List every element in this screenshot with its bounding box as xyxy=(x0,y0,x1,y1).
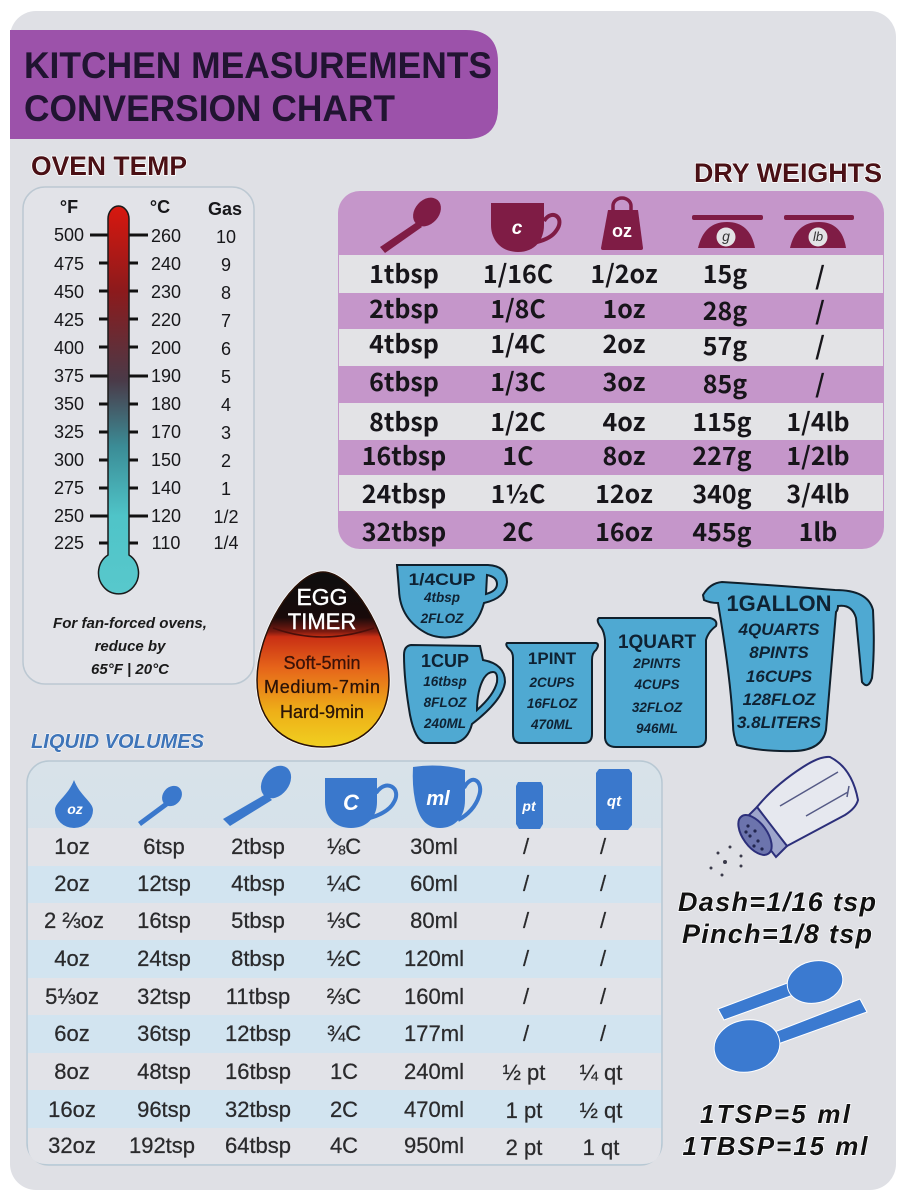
icon: small spoon xyxy=(138,782,186,826)
measure: 1 gallon: 8PINTS xyxy=(749,643,809,662)
temperature scale labels: 275 xyxy=(54,478,84,498)
measure: 1 pint: 470ML xyxy=(530,717,573,732)
heading: dry weights: DRY WEIGHTS xyxy=(694,158,882,188)
measure: 1 pint: 1PINT xyxy=(528,649,577,668)
liquid volumes rows: 12tbsp xyxy=(225,1021,291,1046)
icon: salt shaker xyxy=(710,757,858,876)
dry weights rows: 15g xyxy=(703,255,747,291)
dry weights rows: 115g xyxy=(692,403,752,439)
dry weights rows: 1C xyxy=(502,437,534,473)
temperature scale labels: 150 xyxy=(151,450,181,470)
dry weights rows: 16oz xyxy=(595,513,653,549)
panel: oven temperature xyxy=(23,187,254,684)
text: dash and pinch: Dash=1/16 tsp xyxy=(678,887,876,917)
liquid volumes rows: 60ml xyxy=(410,871,458,896)
temperature scale labels: 300 xyxy=(54,450,84,470)
measure: 1 quart: 32FLOZ xyxy=(632,700,683,715)
icon: g scale xyxy=(692,215,763,248)
dry weights rows: / xyxy=(815,257,825,293)
dry weights rows: 1/2lb xyxy=(786,437,850,473)
measure: 1/4 cup xyxy=(397,565,507,638)
temperature scale labels: Gas xyxy=(208,199,242,219)
temperature scale labels: 1/2 xyxy=(213,507,239,527)
measure: 1 cup xyxy=(404,645,505,743)
icon: qt can: qt xyxy=(607,793,622,810)
heading: oven temp: OVEN TEMP xyxy=(31,151,187,181)
liquid volumes rows: 2 pt xyxy=(506,1135,542,1160)
icon: c cup: C xyxy=(343,790,360,815)
icon: large spoon xyxy=(223,760,297,826)
dry weights rows: 1oz xyxy=(603,290,646,326)
liquid volumes rows: ½ pt xyxy=(503,1060,545,1085)
temperature scale labels: 425 xyxy=(54,310,84,330)
text: teaspoon and tablespoon xyxy=(682,1099,868,1161)
liquid volumes rows: 80ml xyxy=(410,908,458,933)
temperature scale labels: 500 xyxy=(54,225,84,245)
liquid volumes rows: 64tbsp xyxy=(225,1133,291,1158)
icon: oz drop xyxy=(55,780,93,828)
measure: 1/4 cup: 2FLOZ xyxy=(420,611,464,626)
fan-forced note: 65°F | 20°C xyxy=(91,661,170,678)
liquid volumes rows: 30ml xyxy=(410,834,458,859)
temperature scale labels: 230 xyxy=(151,282,181,302)
icon: ml mug: ml xyxy=(426,788,450,810)
fan-forced note: reduce by xyxy=(95,638,166,655)
temperature scale labels: 180 xyxy=(151,394,181,414)
temperature scale labels: °F xyxy=(60,197,78,217)
egg timer: EGG xyxy=(296,584,348,610)
liquid volumes rows: 192tsp xyxy=(129,1133,195,1158)
liquid volumes rows: 1oz xyxy=(54,834,90,859)
dry weights rows: 12oz xyxy=(595,475,653,511)
measure: 1/4 cup: 4tbsp xyxy=(423,590,460,605)
dry weights rows: 1/4C xyxy=(490,325,546,361)
temperature scale labels: 4 xyxy=(221,395,231,415)
icon: qt can xyxy=(596,769,632,830)
liquid volumes rows: / xyxy=(523,871,530,896)
dry weights rows: 28g xyxy=(703,292,747,328)
dry weights rows: 1/2C xyxy=(490,403,546,439)
panel: dry weights table xyxy=(338,191,884,549)
measure: 1 gallon: 1GALLON xyxy=(726,591,832,616)
dry weights rows: 3oz xyxy=(603,363,646,399)
liquid volumes rows: 2tbsp xyxy=(231,834,285,859)
dry weights rows: 57g xyxy=(703,327,747,363)
liquid volumes rows: 6tsp xyxy=(143,834,185,859)
icon: pt can: pt xyxy=(521,798,537,814)
dry weights rows: 227g xyxy=(692,437,752,473)
liquid volumes rows: 11tbsp xyxy=(226,984,290,1009)
measure: 1 quart: 2PINTS xyxy=(632,656,681,671)
temperature scale labels: 140 xyxy=(151,478,181,498)
liquid volumes rows: / xyxy=(523,834,530,859)
temperature scale labels: 7 xyxy=(221,311,231,331)
liquid volumes rows: 5tbsp xyxy=(231,908,285,933)
liquid volumes rows: 8tbsp xyxy=(231,946,285,971)
liquid volumes rows: 96tsp xyxy=(137,1097,191,1122)
dry weights rows: 32tbsp xyxy=(362,513,446,549)
measure: 1 quart: 4CUPS xyxy=(633,677,680,692)
liquid volumes rows xyxy=(44,834,622,1160)
liquid volumes rows: 177ml xyxy=(404,1021,464,1046)
measure: 1 gallon: 3.8LITERS xyxy=(737,713,822,732)
dry weights rows: 2tbsp xyxy=(369,290,439,326)
dry weights rows: 3/4lb xyxy=(786,475,850,511)
title line 1: KITCHEN MEASUREMENTS xyxy=(24,45,492,86)
temperature scale labels: 225 xyxy=(54,533,84,553)
measure: 1 quart: 946ML xyxy=(636,721,678,736)
text: dash and pinch xyxy=(678,887,876,949)
liquid volumes rows: 5⅓oz xyxy=(45,984,99,1009)
icon: g scale: g xyxy=(722,228,730,244)
temperature scale labels: 475 xyxy=(54,254,84,274)
liquid volumes rows: / xyxy=(523,946,530,971)
light row bands xyxy=(339,255,883,511)
dry weights rows: 1lb xyxy=(799,513,837,549)
temperature scale labels: 8 xyxy=(221,283,231,303)
temperature scale labels: 200 xyxy=(151,338,181,358)
icon: measuring spoons xyxy=(710,956,867,1077)
measure: 1 pint xyxy=(506,643,598,743)
liquid volumes rows: ⅛C xyxy=(327,834,361,859)
liquid volumes rows: / xyxy=(600,834,607,859)
liquid volumes rows: 48tsp xyxy=(137,1059,191,1084)
liquid volumes rows: 32tbsp xyxy=(225,1097,291,1122)
liquid volumes rows: 16tsp xyxy=(137,908,191,933)
liquid volumes rows: / xyxy=(600,908,607,933)
dry weights rows: 1/3C xyxy=(490,363,546,399)
measure: 1 pint: 16FLOZ xyxy=(527,696,578,711)
dry weights rows: 8oz xyxy=(603,437,646,473)
dry weights rows: / xyxy=(815,327,825,363)
temperature scale labels: 170 xyxy=(151,422,181,442)
icon: lb scale: lb xyxy=(813,229,823,244)
liquid volumes rows: 4C xyxy=(330,1133,358,1158)
text: teaspoon and tablespoon: 1TBSP=15 ml xyxy=(682,1131,868,1161)
liquid volumes rows: / xyxy=(600,871,607,896)
liquid volumes rows: 4tbsp xyxy=(231,871,285,896)
liquid volumes rows: / xyxy=(523,908,530,933)
dry weights rows: 455g xyxy=(692,513,752,549)
egg timer: TIMER xyxy=(288,609,356,634)
fan-forced note: For fan-forced ovens, xyxy=(53,615,207,632)
dry weights rows: 1½C xyxy=(491,475,545,511)
temperature scale labels: 10 xyxy=(216,227,236,247)
liquid volumes rows: / xyxy=(523,1021,530,1046)
dry weights rows: 8tbsp xyxy=(369,403,439,439)
dry weights rows xyxy=(362,255,850,549)
egg timer: Hard-9min xyxy=(280,702,364,722)
icon: oz drop: oz xyxy=(67,801,83,817)
row bands xyxy=(28,828,661,1164)
liquid volumes rows: 950ml xyxy=(404,1133,464,1158)
egg timer: Medium-7min xyxy=(264,677,380,697)
temperature scale labels: °C xyxy=(150,197,170,217)
measure: 1 gallon xyxy=(703,582,874,751)
dry weights rows: 1tbsp xyxy=(369,255,439,291)
temperature scale labels: 120 xyxy=(151,506,181,526)
liquid volumes rows: ⅓C xyxy=(327,908,361,933)
liquid volumes rows: 2 ⅔oz xyxy=(44,908,104,933)
temperature scale labels: 1/4 xyxy=(213,533,239,553)
thermometer ticks xyxy=(90,235,148,543)
icon: cup: c xyxy=(512,218,523,239)
temperature scale labels: 375 xyxy=(54,366,84,386)
liquid volumes rows: 12tsp xyxy=(137,871,191,896)
liquid volumes rows: ¾C xyxy=(327,1021,361,1046)
icon: oz weight: oz xyxy=(612,221,632,241)
egg timer xyxy=(257,572,389,747)
temperature scale labels: 350 xyxy=(54,394,84,414)
measure: 1 quart: 1QUART xyxy=(618,632,696,653)
temperature scale labels: 190 xyxy=(151,366,181,386)
dry weights rows: 1/2oz xyxy=(590,255,658,291)
dry weights rows: 1/4lb xyxy=(786,403,850,439)
icon: c cup xyxy=(325,778,396,828)
title banner xyxy=(10,30,498,139)
liquid volumes rows: 1 pt xyxy=(506,1098,542,1123)
liquid volumes rows: 4oz xyxy=(54,946,90,971)
dry weights rows: 1/16C xyxy=(483,255,553,291)
liquid volumes rows: 32tsp xyxy=(137,984,191,1009)
temperature scale labels: 220 xyxy=(151,310,181,330)
liquid volumes rows: 160ml xyxy=(404,984,464,1009)
liquid volumes rows: ¼C xyxy=(327,871,361,896)
liquid volumes rows: 470ml xyxy=(404,1097,464,1122)
measure: 1 gallon: 4QUARTS xyxy=(738,620,820,639)
liquid volumes rows: 6oz xyxy=(54,1021,90,1046)
icon: oz weight xyxy=(601,198,643,250)
liquid volumes rows: 2oz xyxy=(54,871,90,896)
liquid volumes rows: / xyxy=(523,984,530,1009)
dry weights rows: 85g xyxy=(703,365,747,401)
temperature scale labels: 110 xyxy=(152,533,180,553)
measure: 1 cup: 8FLOZ xyxy=(424,695,467,710)
temperature scale labels: 5 xyxy=(221,367,231,387)
temperature scale labels: 260 xyxy=(151,226,181,246)
liquid volumes rows: 2C xyxy=(330,1097,358,1122)
temperature scale labels: 3 xyxy=(221,423,231,443)
liquid volumes rows: 240ml xyxy=(404,1059,464,1084)
icon: pt can xyxy=(516,782,543,829)
dry weights rows: 4oz xyxy=(603,403,646,439)
liquid volumes rows: ⅔C xyxy=(327,984,361,1009)
measure: 1 cup: 1CUP xyxy=(421,651,469,671)
text: dash and pinch: Pinch=1/8 tsp xyxy=(682,919,872,949)
liquid volumes rows: 1C xyxy=(330,1059,358,1084)
temperature scale labels: 2 xyxy=(221,451,231,471)
liquid volumes rows: 8oz xyxy=(54,1059,90,1084)
fan-forced note xyxy=(53,615,207,678)
liquid volumes rows: / xyxy=(600,946,607,971)
liquid volumes rows: ¼ qt xyxy=(580,1060,622,1085)
measure: 1/4 cup: 1/4CUP xyxy=(408,570,476,589)
dry weights rows: 2C xyxy=(502,513,534,549)
dry weights rows: 1/8C xyxy=(490,290,546,326)
temperature scale labels: 9 xyxy=(221,255,231,275)
liquid volumes rows: 36tsp xyxy=(137,1021,191,1046)
egg timer: Soft-5min xyxy=(283,653,361,673)
heading: liquid volumes: LIQUID VOLUMES xyxy=(31,731,205,753)
temperature scale labels: 325 xyxy=(54,422,84,442)
dry weights rows: 6tbsp xyxy=(369,363,439,399)
liquid volumes rows: 24tsp xyxy=(137,946,191,971)
liquid volumes rows: 120ml xyxy=(404,946,464,971)
dry weights rows: 24tbsp xyxy=(362,475,446,511)
dry weights rows: 2oz xyxy=(603,325,646,361)
dry weights rows: 4tbsp xyxy=(369,325,439,361)
dry weights rows: / xyxy=(815,365,825,401)
temperature scale labels xyxy=(54,197,242,553)
temperature scale labels: 450 xyxy=(54,282,84,302)
liquid volumes rows: ½ qt xyxy=(580,1098,622,1123)
text: teaspoon and tablespoon: 1TSP=5 ml xyxy=(700,1099,851,1129)
measure: 1 cup: 16tbsp xyxy=(423,674,467,689)
temperature scale labels: 250 xyxy=(54,506,84,526)
icon: cup xyxy=(491,203,559,252)
thermometer xyxy=(98,206,138,594)
liquid volumes rows: / xyxy=(600,984,607,1009)
dry weights rows: / xyxy=(815,292,825,328)
liquid volumes rows: 16oz xyxy=(48,1097,96,1122)
title line 2: CONVERSION CHART xyxy=(24,88,395,129)
liquid volumes rows: 1 qt xyxy=(583,1135,619,1160)
temperature scale labels: 240 xyxy=(151,254,181,274)
panel: liquid volumes table xyxy=(27,760,662,1165)
icon: ml mug xyxy=(413,766,480,828)
measure: 1 gallon: 128FLOZ xyxy=(743,690,816,709)
liquid volumes rows: 16tbsp xyxy=(225,1059,291,1084)
temperature scale labels: 400 xyxy=(54,338,84,358)
icon: spoon xyxy=(380,192,447,253)
measure: 1 gallon: 16CUPS xyxy=(746,667,813,686)
dry weights rows: 16tbsp xyxy=(362,437,446,473)
measure: 1 cup: 240ML xyxy=(423,716,466,731)
measure: 1 pint: 2CUPS xyxy=(528,675,575,690)
measure: 1 quart xyxy=(598,618,716,747)
icon: lb scale xyxy=(784,215,854,248)
dry weights rows: 340g xyxy=(692,475,752,511)
liquid volumes rows: 32oz xyxy=(48,1133,96,1158)
temperature scale labels: 1 xyxy=(221,479,231,499)
liquid volumes rows: / xyxy=(600,1021,607,1046)
temperature scale labels: 6 xyxy=(221,339,231,359)
liquid volumes rows: ½C xyxy=(327,946,361,971)
